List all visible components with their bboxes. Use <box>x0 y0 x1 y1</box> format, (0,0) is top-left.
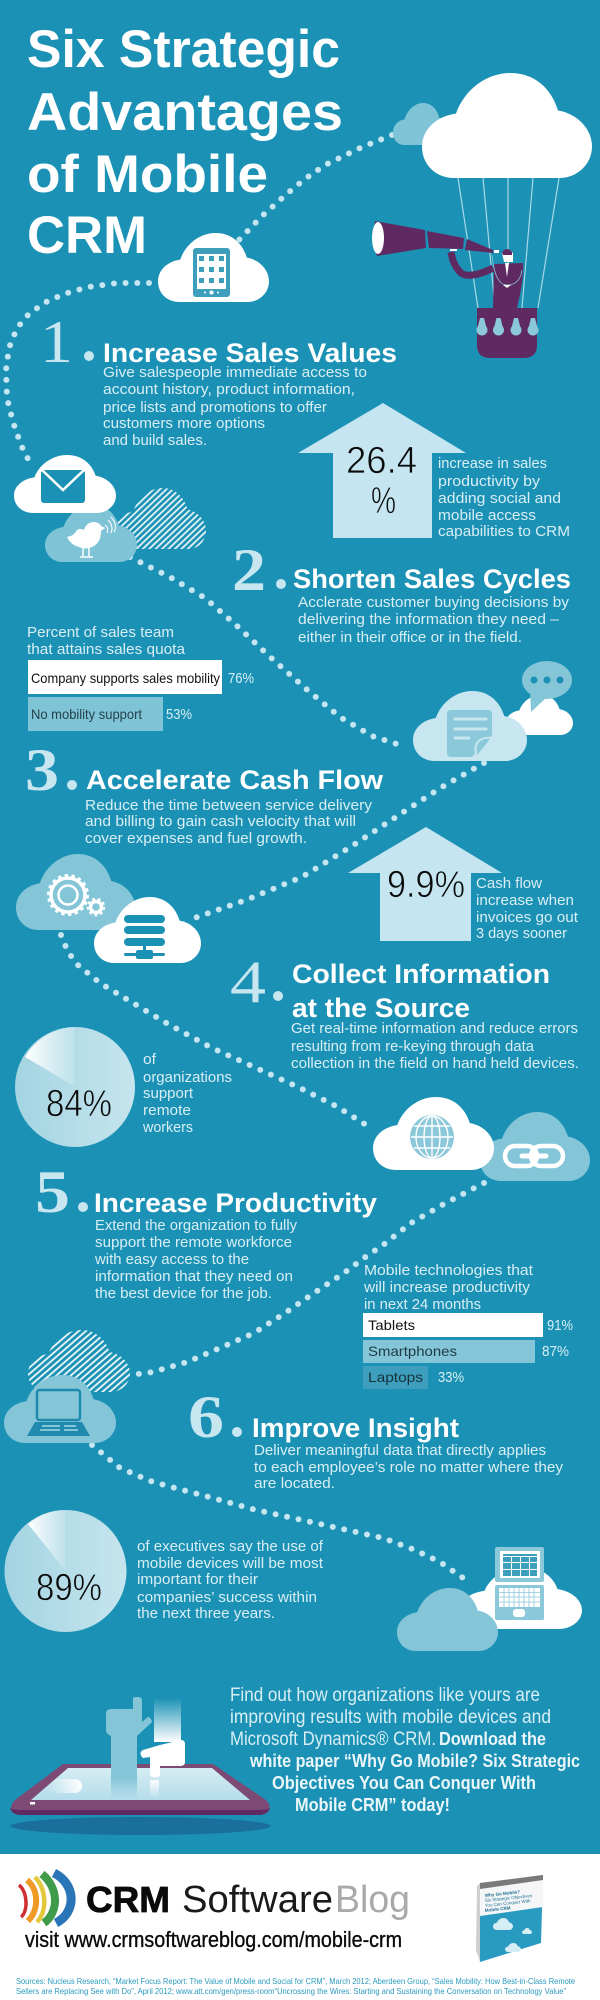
bar chart: mobile technologies: will increase productivity <box>363 1279 531 1296</box>
stat text: sales productivity: productivity by <box>438 473 541 490</box>
section 4 text: resulting from re-keying through data <box>291 1038 535 1055</box>
book cover: Why Go Mobile? <box>485 1889 520 1898</box>
section 3 heading <box>25 737 384 803</box>
section 1 text <box>103 364 367 449</box>
section 2 text <box>298 594 570 646</box>
book cover: Six Strategic Objectives <box>485 1893 533 1903</box>
section 2 heading <box>232 537 571 603</box>
title <box>27 20 343 265</box>
section 2 text: either in their office or in the field. <box>298 629 522 646</box>
stat text: remote workers: organizations <box>143 1069 232 1086</box>
logo: CRM Software Blog: Software <box>182 1879 333 1921</box>
book cover <box>476 1875 543 1962</box>
icon: email, twitter and hatched clouds <box>14 455 206 562</box>
stat text: executives: mobile devices will be most <box>137 1555 324 1572</box>
stat text: executives: the next three years. <box>137 1605 275 1622</box>
icon: gears <box>48 876 104 915</box>
icon: man with telescope <box>372 221 523 308</box>
stat text: executives: of executives say the use of <box>137 1538 324 1555</box>
section 3 heading: 3 <box>25 737 59 803</box>
arrow callout: 26.4% <box>298 403 466 538</box>
section 5 text: with easy access to the <box>94 1251 249 1268</box>
section 2 text: Acclerate customer buying decisions by <box>298 594 570 611</box>
section 1 text: and build sales. <box>103 432 207 449</box>
icon: basket <box>476 308 538 358</box>
icon: bird <box>67 517 115 557</box>
bar chart: mobile technologies: 91% <box>547 1317 573 1334</box>
stat text: cash flow: invoices go out <box>476 909 579 926</box>
call to action text <box>230 1685 580 1815</box>
section 1 heading: 1 <box>40 309 73 375</box>
section 6 heading <box>188 1384 459 1450</box>
section 5 heading <box>35 1159 377 1225</box>
section 5 text: support the remote workforce <box>95 1234 292 1251</box>
section 5 text: the best device for the job. <box>95 1285 272 1302</box>
stat text: executives <box>137 1538 324 1622</box>
arrow callout: 26.4%: 26.4 <box>346 440 417 482</box>
section 4 heading: 4 <box>230 949 266 1015</box>
section 1 text: price lists and promotions to offer <box>103 399 327 416</box>
stat text: cash flow <box>476 875 579 942</box>
bar chart: mobile technologies: 33% <box>438 1369 464 1386</box>
stat text: cash flow: Cash flow <box>476 875 542 892</box>
call to action text: Mobile CRM” today! <box>295 1795 450 1815</box>
section 2 heading: Shorten Sales Cycles <box>293 564 571 594</box>
section 6 text: to each employee’s role no matter where they <box>254 1459 563 1476</box>
call to action text: Microsoft Dynamics® CRM. <box>230 1729 436 1750</box>
stat text: cash flow: increase when <box>476 892 574 909</box>
bar chart: mobile technologies: Tablets <box>368 1317 415 1333</box>
section 3 heading: Accelerate Cash Flow <box>86 765 384 795</box>
icon: globe <box>410 1115 454 1159</box>
section 1 heading: Increase Sales Values <box>103 338 397 368</box>
icon: folding device <box>495 1547 544 1620</box>
pie chart: 89% <box>4 1510 126 1632</box>
call to action text: Find out how organizations like yours are <box>230 1685 540 1706</box>
icon: server <box>124 915 165 959</box>
section 4 heading <box>230 949 550 1023</box>
bar chart: mobile technologies: Smartphones <box>368 1343 457 1359</box>
stat text: sales productivity: adding social and <box>438 490 561 507</box>
call to action text: improving results with mobile devices and <box>230 1707 551 1728</box>
icon: hot air balloon cloud with man and telescope <box>372 73 592 358</box>
section 5 text: Extend the organization to fully <box>95 1217 297 1234</box>
icon: laptop and hatched clouds <box>4 1330 130 1443</box>
bar chart: sales quota: that attains sales quota <box>27 641 186 658</box>
footer panel <box>0 1854 600 2000</box>
website link: visit www.crmsoftwareblog.com/mobile-crm <box>25 1927 402 1952</box>
book cover: You Can Conquer With <box>485 1898 531 1908</box>
icon: gears and server clouds <box>16 854 201 963</box>
icon: laptop <box>27 1390 90 1436</box>
bar chart: mobile technologies: Laptops <box>368 1369 423 1385</box>
stat text: executives: companies’ success within <box>137 1589 317 1606</box>
section 5 text <box>94 1217 297 1302</box>
section 2 text: delivering the information they need – <box>298 611 560 628</box>
sources <box>16 1976 575 1996</box>
stat text: remote workers: workers <box>142 1119 193 1136</box>
arrow callout: 26.4%: % <box>371 480 396 522</box>
icon: speech bubble <box>522 661 572 712</box>
stat text: cash flow: 3 days sooner <box>476 925 567 942</box>
tablet shadow <box>10 1817 270 1835</box>
logo mark: colored arcs <box>19 1873 71 1923</box>
logo: CRM Software Blog: Blog <box>335 1879 410 1921</box>
bar chart: sales quota: Percent of sales team <box>27 624 174 641</box>
right hand <box>140 1698 185 1798</box>
section 3 text: cover expenses and fuel growth. <box>85 830 307 847</box>
section 5 heading: Increase Productivity <box>94 1188 377 1218</box>
section 1 text: customers more options <box>103 415 265 432</box>
title: CRM <box>27 206 147 265</box>
call to action text: Download the <box>439 1729 546 1749</box>
stat text: sales productivity: mobile access <box>438 507 536 524</box>
title: of Mobile <box>27 145 268 204</box>
section 6 text <box>254 1442 563 1492</box>
stat text: remote workers: support <box>143 1085 194 1102</box>
section 4 text: collection in the field on hand held devices. <box>291 1055 579 1072</box>
section 2 heading: 2 <box>232 537 266 603</box>
left hand <box>106 1697 152 1800</box>
stat text: sales productivity: increase in sales <box>438 455 547 472</box>
icon: tablet and keyboard cloud <box>397 1547 582 1651</box>
logo: CRM Software Blog: CRM <box>86 1879 170 1920</box>
stat text: sales productivity: capabilities to CRM <box>438 523 570 540</box>
book cover: Mobile CRM <box>485 1905 511 1913</box>
section 6 text: Deliver meaningful data that directly applies <box>254 1442 546 1459</box>
section 4 heading: Collect Information <box>292 959 550 989</box>
stat text: remote workers: remote <box>143 1102 191 1119</box>
arrow callout: 9.9%: 9.9% <box>387 864 465 906</box>
section 6 heading: 6 <box>188 1384 224 1450</box>
call to action text: Objectives You Can Conquer With <box>272 1773 536 1793</box>
bar chart: mobile technologies: Mobile technologies that <box>364 1262 534 1279</box>
section 4 heading: at the Source <box>292 993 470 1023</box>
section 5 heading: 5 <box>35 1159 70 1225</box>
title: Six Strategic <box>27 20 340 79</box>
pie chart: 84% <box>15 1027 135 1147</box>
icon: envelope <box>41 470 85 503</box>
section 1 heading <box>40 309 397 375</box>
bar chart: mobile technologies: in next 24 months <box>364 1296 481 1313</box>
bar chart: sales quota <box>27 624 254 731</box>
section 1 text: Give salespeople immediate access to <box>103 364 367 381</box>
icon: hands on tablet <box>10 1697 270 1835</box>
bar chart: sales quota: No mobility support <box>31 706 142 722</box>
icon: globe and link clouds <box>373 1097 590 1181</box>
arrow callout: 9.9% <box>348 827 502 941</box>
pie chart: 84%: 84% <box>46 1083 112 1125</box>
bar chart: sales quota: 53% <box>166 706 192 723</box>
section 1 text: account history, product information, <box>103 381 355 398</box>
icon: tablet cloud <box>158 233 269 302</box>
logo: CRM Software Blog <box>19 1873 410 1923</box>
icon: document <box>447 710 492 757</box>
stat text: remote workers <box>142 1051 232 1136</box>
section 4 text <box>291 1020 579 1072</box>
section 5 text: information that they need on <box>95 1268 293 1285</box>
bar chart: sales quota: Company supports sales mobility <box>31 670 220 686</box>
bar chart: mobile technologies <box>363 1262 573 1389</box>
stat text: executives: important for their <box>137 1571 258 1588</box>
section 6 text: are located. <box>254 1475 335 1492</box>
bar chart: sales quota: 76% <box>228 670 254 687</box>
section 3 text: Reduce the time between service delivery <box>85 797 373 814</box>
stat text: remote workers: of <box>143 1051 157 1068</box>
section 4 text: Get real-time information and reduce errors <box>291 1020 578 1037</box>
section 3 text <box>85 797 373 847</box>
section 6 heading: Improve Insight <box>252 1413 459 1443</box>
icon: document and chat clouds <box>413 661 573 761</box>
bar chart: mobile technologies: 87% <box>542 1343 569 1360</box>
title: Advantages <box>27 83 343 142</box>
stat text: sales productivity <box>438 455 570 540</box>
icon: chain link <box>505 1146 563 1166</box>
pie chart: 89%: 89% <box>36 1567 102 1609</box>
dotted connector path <box>6 135 484 1582</box>
section 3 text: and billing to gain cash velocity that will <box>85 813 356 830</box>
